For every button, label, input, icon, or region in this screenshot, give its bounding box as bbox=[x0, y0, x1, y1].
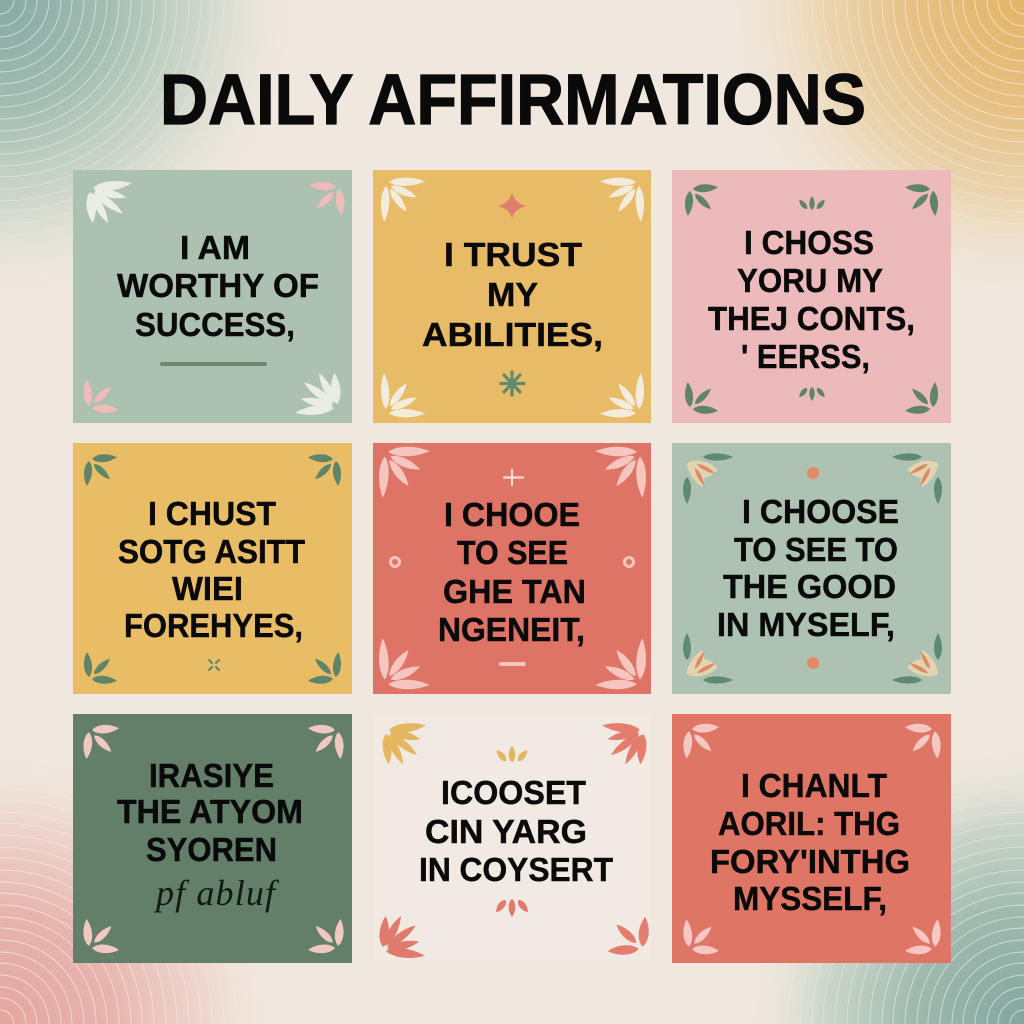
icon: bottom dot bbox=[807, 657, 819, 669]
text block: ABILITIES, bbox=[422, 316, 603, 353]
panel: I am worthy of success bbox=[73, 170, 352, 423]
text block: MY bbox=[487, 276, 538, 313]
text block: SOTG ASITT bbox=[118, 533, 305, 570]
text block: SUCCESS, bbox=[135, 306, 295, 343]
icon: corner sprays bbox=[684, 183, 939, 415]
icon: plus bbox=[504, 470, 523, 485]
icon: bottom leaves bbox=[797, 386, 827, 401]
text block: IN COYSERT bbox=[419, 851, 613, 888]
icon: corner sprays bbox=[378, 446, 647, 690]
divider bar bbox=[160, 362, 267, 366]
script text: pf abluf bbox=[153, 873, 280, 913]
text block bbox=[117, 757, 303, 868]
text block: I CHANLT bbox=[741, 767, 887, 804]
icon: corner sprays bbox=[83, 453, 342, 685]
icon: top dot bbox=[807, 467, 819, 479]
panel: Irasiye bbox=[73, 714, 352, 963]
icon: coral spray top right bbox=[602, 721, 648, 766]
panel: I trust my abilities bbox=[373, 170, 651, 423]
icon: coral bottom leaves bbox=[494, 898, 530, 917]
text block: I CHOOE bbox=[444, 496, 580, 533]
icon: corner sprays bbox=[82, 179, 346, 417]
icon: top leaves bbox=[797, 196, 827, 211]
icon: corner sprays bbox=[380, 177, 645, 418]
panel: I choose to see the good bbox=[672, 443, 951, 694]
text block: IRASIYE bbox=[149, 757, 274, 794]
text block: IN MYSELF, bbox=[717, 606, 895, 643]
icon: gold spray bbox=[382, 721, 426, 766]
text block: TO SEE TO bbox=[734, 531, 898, 568]
text block: ' EERSS, bbox=[741, 338, 870, 375]
text block: NGENEIT, bbox=[438, 611, 585, 648]
text block: FORY'INTHG bbox=[710, 843, 910, 880]
panel: Icooset bbox=[373, 714, 651, 963]
text block bbox=[708, 224, 915, 375]
text block bbox=[438, 496, 586, 648]
icon: coral star bbox=[498, 192, 526, 219]
text block: THE ATYOM bbox=[117, 793, 303, 830]
icon: right ring bbox=[624, 558, 634, 566]
text block: CIN YARG bbox=[425, 813, 587, 850]
text block bbox=[422, 236, 603, 353]
text block: YORU MY bbox=[737, 262, 883, 299]
text block bbox=[118, 495, 305, 644]
text block: WIEI bbox=[172, 570, 243, 607]
icon: gold top leaves bbox=[494, 746, 530, 763]
panel: I chanlt bbox=[672, 714, 951, 963]
icon: coral spray bottom right bbox=[607, 916, 650, 956]
icon: corner sprays bbox=[82, 724, 345, 954]
text block bbox=[117, 229, 319, 343]
text block: WORTHY OF bbox=[117, 267, 319, 304]
text block: THE GOOD bbox=[723, 568, 896, 605]
text block: MYSSELF, bbox=[733, 880, 887, 917]
text block: I AM bbox=[180, 229, 250, 266]
text block: THEJ CONTS, bbox=[708, 300, 915, 337]
icon: corner sprays bbox=[683, 453, 942, 684]
icon: small cross bbox=[209, 660, 219, 670]
text block bbox=[717, 493, 899, 643]
icon: dash bbox=[499, 662, 526, 666]
title: DAILY AFFIRMATIONS bbox=[160, 61, 866, 140]
text block bbox=[419, 774, 613, 888]
icon: green asterisk bbox=[501, 372, 524, 395]
text block: I TRUST bbox=[444, 236, 582, 273]
panel: I choss bbox=[672, 170, 951, 423]
panel: I chust bbox=[73, 443, 352, 694]
text block: SYOREN bbox=[146, 831, 277, 868]
text block: I CHUST bbox=[148, 495, 276, 532]
panel: I chooe bbox=[373, 443, 651, 694]
icon: coral spray bottom left bbox=[378, 914, 425, 960]
text block: GHE TAN bbox=[443, 573, 586, 610]
icon: left ring bbox=[390, 558, 400, 566]
text block: ICOOSET bbox=[441, 774, 586, 811]
text block: TO SEE bbox=[457, 534, 568, 571]
text block: FOREHYES, bbox=[124, 607, 303, 644]
text block: AORIL: THG bbox=[718, 805, 900, 842]
text block bbox=[710, 767, 910, 917]
icon: corner sprays bbox=[682, 723, 942, 955]
text block: I CHOOSE bbox=[742, 493, 899, 530]
text block: I CHOSS bbox=[744, 224, 874, 261]
